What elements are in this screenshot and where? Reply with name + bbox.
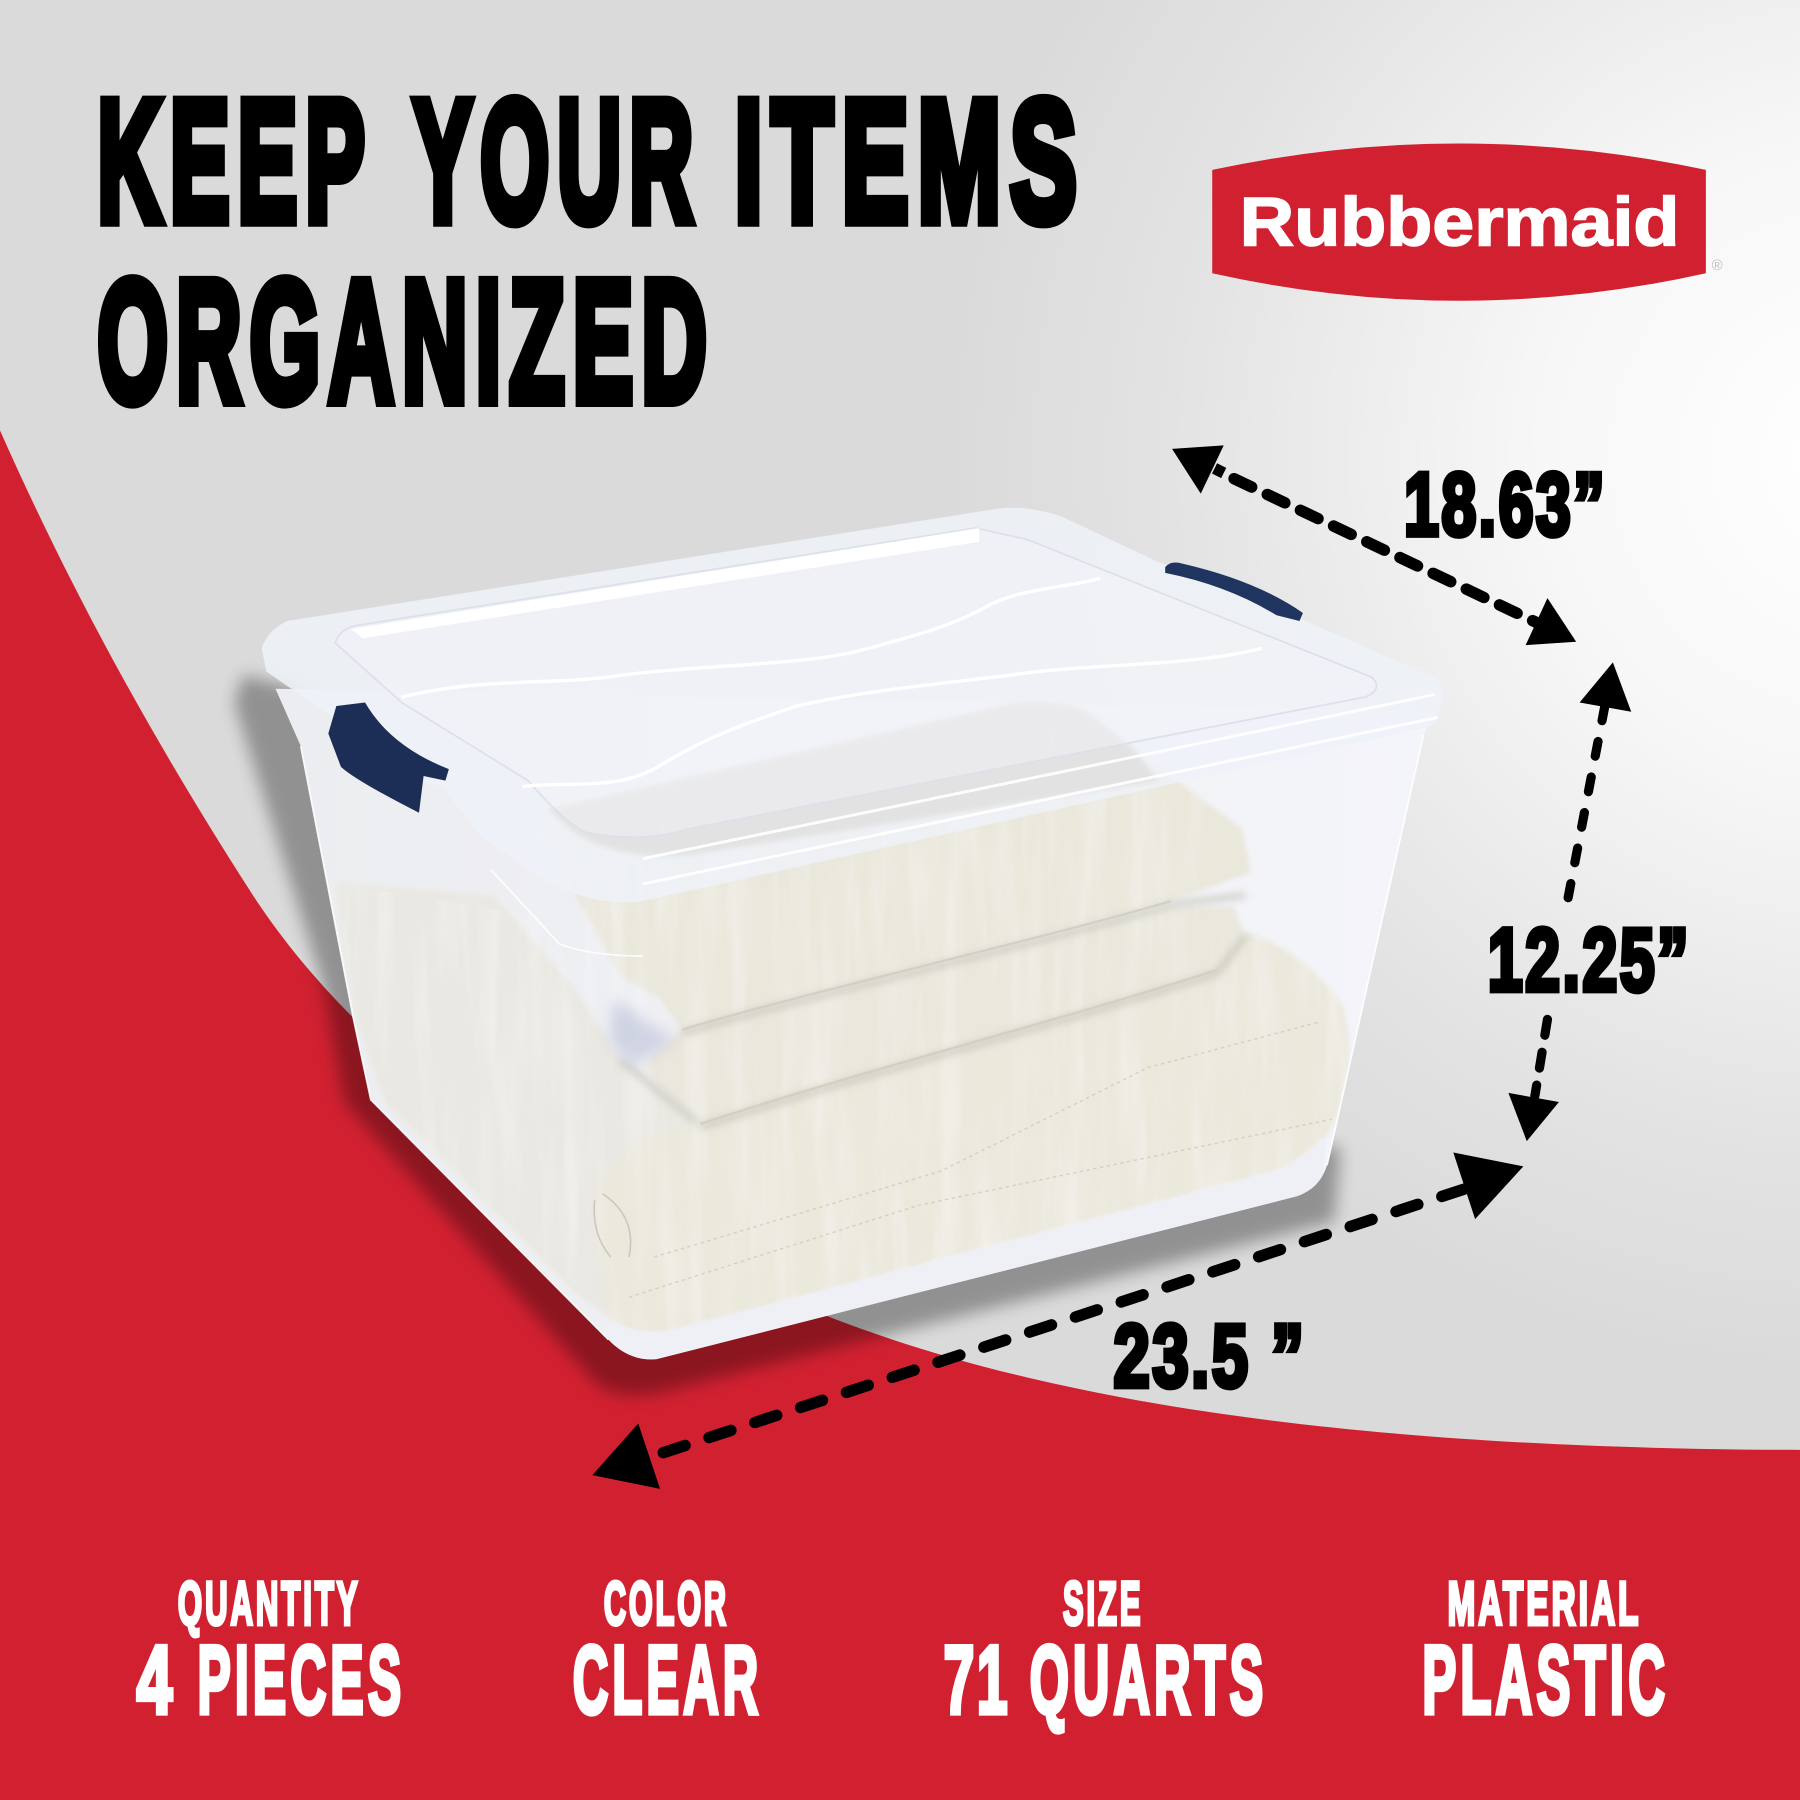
spec: size: 71 — [944, 1627, 1010, 1734]
logo: Rubbermaid — [1212, 143, 1723, 301]
label: 23.5 in: 23.5 ” — [1114, 1306, 1306, 1406]
spec: color — [573, 1569, 762, 1734]
pale highlights on bedding — [490, 792, 1344, 1322]
spec: quantity — [137, 1569, 405, 1734]
plastic base rim — [597, 1136, 1327, 1366]
spec: size: SIZE — [1063, 1569, 1143, 1637]
title: ITEMS — [735, 65, 1086, 257]
spec: quantity: 4 — [137, 1627, 172, 1734]
label: 12.25 in: 12.25” — [1488, 910, 1691, 1010]
spec: material — [1422, 1569, 1669, 1734]
bedding seen through lid — [548, 703, 1159, 856]
lid moulded curves — [403, 579, 1260, 786]
arrow: width dimension 23.5 — [592, 1153, 1523, 1489]
lid highlight strip — [351, 528, 979, 638]
spec: size — [944, 1569, 1267, 1734]
lid rim lines — [643, 695, 1437, 884]
fold shading between layers — [621, 895, 1246, 1127]
title: KEEP — [98, 65, 373, 257]
label: 18.63 in: 18.63” — [1404, 454, 1607, 554]
product: clear storage box with bedding — [234, 508, 1443, 1395]
title: ORGANIZED — [98, 246, 715, 438]
arrow: depth dimension 18.63 — [1172, 445, 1576, 645]
far latch — [1165, 562, 1303, 621]
red curved band — [0, 430, 1800, 1800]
fold lines and stitching — [594, 901, 1332, 1297]
left side of bedding — [335, 883, 697, 1320]
spec: material: MATERIAL — [1448, 1569, 1642, 1637]
logo: Rubbermaid: ® — [1712, 257, 1723, 274]
title: YOUR — [413, 65, 701, 257]
logo: Rubbermaid: Rubbermaid — [1240, 184, 1679, 261]
spec: color: COLOR — [604, 1569, 729, 1637]
spec: quantity: QUANTITY — [178, 1569, 360, 1637]
folded bedding — [337, 782, 1350, 1360]
arrow: height dimension 12.25 — [1508, 662, 1631, 1141]
box wall edges — [301, 735, 1423, 1340]
middle towel — [641, 907, 1246, 1124]
spec: color: CLEAR — [573, 1627, 762, 1734]
title — [98, 65, 1086, 438]
box shadow — [234, 675, 1341, 1395]
box body — [276, 689, 1435, 1359]
lid inner panel — [335, 528, 1376, 837]
near latch — [328, 703, 449, 813]
blue-grey fold shadows — [608, 999, 677, 1068]
bottom blanket — [595, 932, 1349, 1332]
spec: quantity: PIECES — [197, 1627, 405, 1734]
box lid — [262, 508, 1443, 902]
spec: size: QUARTS — [1030, 1627, 1267, 1734]
top towel — [574, 782, 1252, 1028]
